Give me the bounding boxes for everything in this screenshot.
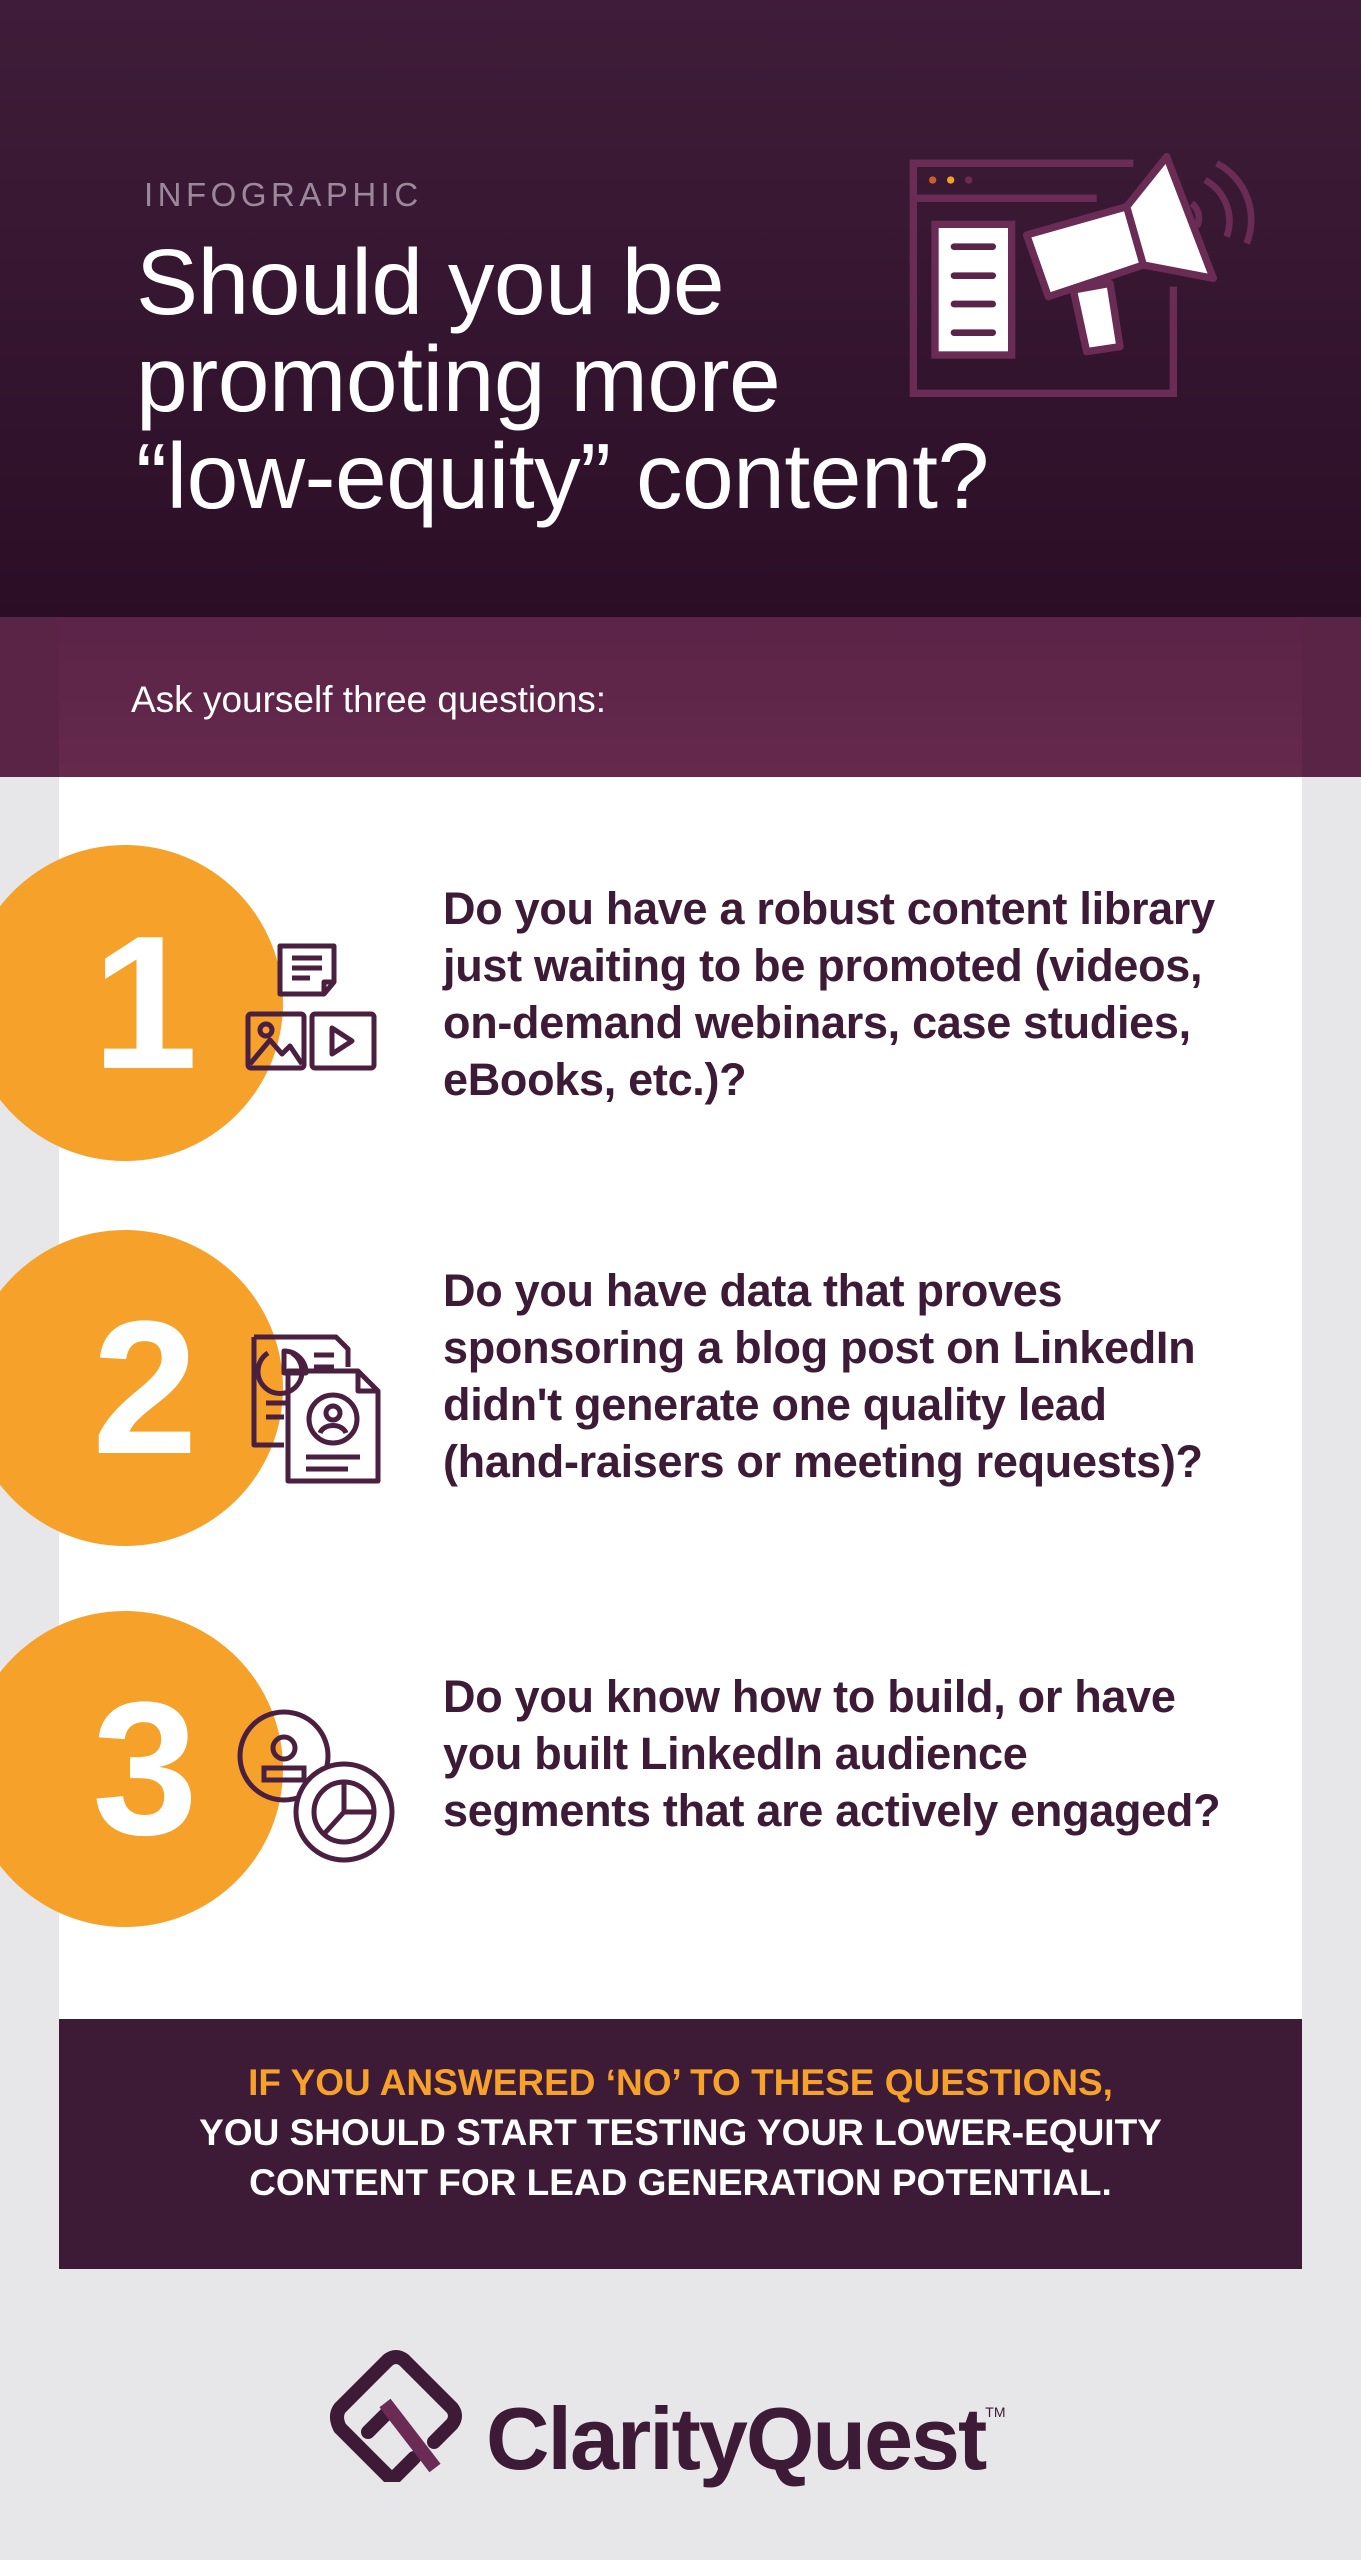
logo: ClarityQuest xyxy=(330,2350,1006,2488)
callout: conclusion: IF YOU ANSWERED ‘NO’ TO THESE QUESTIONS, xyxy=(248,2062,1113,2103)
question 3 text: you built LinkedIn audience xyxy=(443,1728,1027,1779)
question 2 text xyxy=(443,1265,1203,1487)
circle: number 2: 2 xyxy=(92,1282,198,1494)
circle: number 3: 3 xyxy=(92,1663,198,1875)
circle: number 1 xyxy=(0,845,283,1161)
icon: data reports xyxy=(252,1334,380,1484)
title: Should you be xyxy=(136,230,724,334)
panel: questions xyxy=(59,777,1302,2019)
question 2 text: sponsoring a blog post on LinkedIn xyxy=(443,1322,1195,1373)
title: promoting more xyxy=(136,327,780,431)
question 1 text: on-demand webinars, case studies, xyxy=(443,997,1191,1048)
question 1 text: eBooks, etc.)? xyxy=(443,1054,746,1105)
title: “low-equity” content? xyxy=(136,424,989,528)
circle: number 2 xyxy=(0,1230,283,1546)
icon: browser with megaphone xyxy=(910,153,1254,397)
callout: conclusion: CONTENT FOR LEAD GENERATION POTENTIAL. xyxy=(249,2162,1112,2203)
label: infographic: INFOGRAPHIC xyxy=(144,176,423,213)
band text: Ask yourself three questions: xyxy=(131,679,606,720)
title xyxy=(136,230,989,528)
question 1 text: Do you have a robust content library xyxy=(443,883,1215,934)
question 3 text xyxy=(443,1671,1220,1836)
question 2 text: (hand-raisers or meeting requests)? xyxy=(443,1436,1203,1487)
question 3 text: segments that are actively engaged? xyxy=(443,1785,1220,1836)
circle: number 1: 1 xyxy=(92,897,198,1109)
callout: conclusion xyxy=(59,2019,1302,2269)
question 1 text: just waiting to be promoted (videos, xyxy=(443,940,1202,991)
callout: conclusion: YOU SHOULD START TESTING YOUR LOWER-EQUITY xyxy=(199,2112,1162,2153)
icon: audience segments xyxy=(238,1710,394,1862)
icon: content library xyxy=(246,944,376,1070)
logo: ClarityQuest: ClarityQuestTM xyxy=(486,2389,1006,2488)
question 2 text: Do you have data that proves xyxy=(443,1265,1062,1316)
circle: number 3 xyxy=(0,1611,283,1927)
question 1 text xyxy=(442,883,1215,1105)
band: ask yourself xyxy=(0,617,1361,777)
question 3 text: Do you know how to build, or have xyxy=(443,1671,1176,1722)
question 2 text: didn't generate one quality lead xyxy=(443,1379,1107,1430)
header xyxy=(0,0,1361,617)
